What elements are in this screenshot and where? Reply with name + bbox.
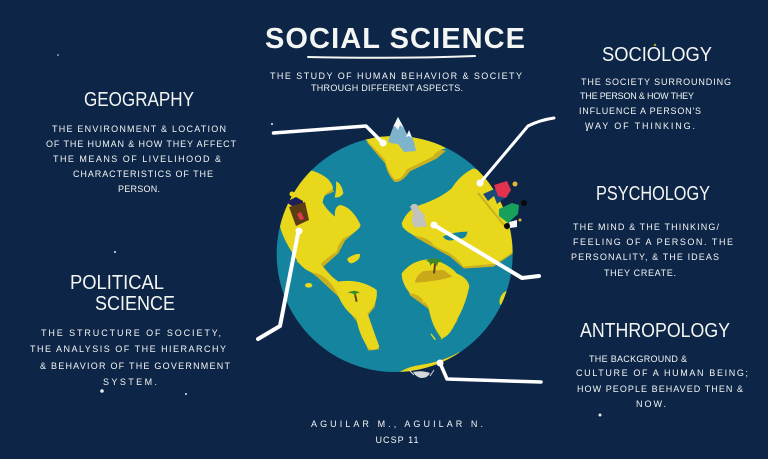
heading: anthropology: ANTHROPOLOGY xyxy=(580,320,730,342)
title: SOCIAL SCIENCE xyxy=(265,23,525,55)
land shadows xyxy=(297,142,513,351)
panel: geography xyxy=(46,89,236,194)
text: geography description: PERSON. xyxy=(118,184,160,194)
heading: sociology: SOCIOLOGY xyxy=(602,44,712,66)
text: psychology description xyxy=(571,222,733,278)
arrow: anthropology line xyxy=(440,363,541,382)
text: geography description: OF THE HUMAN & HOW THEY AFFECT xyxy=(46,139,236,149)
text: anthropology description: THE BACKGROUND & xyxy=(589,354,687,364)
text: political science description: THE STRUCTURE OF SOCIETY, xyxy=(41,328,221,338)
heading: political science: POLITICAL xyxy=(70,272,164,294)
icon: palm tree south america xyxy=(347,291,360,302)
arrow: political science line xyxy=(258,231,298,339)
land: south cap xyxy=(400,352,460,372)
heading: political science xyxy=(70,272,175,315)
text: sociology description xyxy=(579,77,731,131)
ocean xyxy=(277,136,513,372)
land: islands xyxy=(305,181,508,340)
panel: anthropology xyxy=(576,320,748,409)
credits: UCSP 11 xyxy=(376,435,418,445)
subtitle: THE STUDY OF HUMAN BEHAVIOR & SOCIETY xyxy=(270,71,522,81)
text: psychology description: FEELING OF A PERSON. THE xyxy=(573,237,733,247)
text: geography description: THE ENVIRONMENT & LOCATION xyxy=(52,124,226,134)
land: north america xyxy=(280,170,379,350)
text: political science description: THE ANALYSIS OF THE HIERARCHY xyxy=(30,344,226,354)
subtitle xyxy=(270,71,522,93)
text: sociology description: INFLUENCE A PERSON'S xyxy=(579,106,701,116)
panel: sociology xyxy=(579,44,731,131)
credits: AGUILAR M., AGUILAR N. xyxy=(311,419,483,429)
text: geography description: CHARACTERISTICS OF THE xyxy=(73,169,213,179)
icon: desert patch xyxy=(415,270,453,283)
arrow: geography line xyxy=(274,126,383,143)
land: north xyxy=(365,133,446,179)
icon: palm tree africa xyxy=(426,258,444,273)
text: political science description xyxy=(30,328,230,387)
icon: podium with speaker xyxy=(286,192,309,226)
icon: thinker statue xyxy=(410,204,427,227)
heading: geography: GEOGRAPHY xyxy=(84,89,194,111)
text: anthropology description: HOW PEOPLE BEHAVED THEN & xyxy=(577,384,743,394)
arrow: sociology line xyxy=(480,118,554,183)
background specks xyxy=(57,44,656,417)
arrow: psychology line xyxy=(434,225,539,278)
heading: psychology: PSYCHOLOGY xyxy=(596,183,710,205)
text: anthropology description: NOW. xyxy=(636,399,666,409)
panel: political science xyxy=(30,272,230,387)
text: psychology description: THEY CREATE. xyxy=(604,268,676,278)
panel: psychology xyxy=(571,183,733,278)
icon: people xyxy=(478,181,527,230)
heading: political science: SCIENCE xyxy=(95,293,175,315)
icon: skull relic xyxy=(409,370,434,378)
text: sociology description: THE SOCIETY SURROUNDING xyxy=(581,77,731,87)
text: sociology description: THE PERSON & HOW THEY xyxy=(580,91,694,101)
globe xyxy=(277,133,515,377)
text: political science description: & BEHAVIOR OF THE GOVERNMENT xyxy=(40,361,230,371)
text: anthropology description xyxy=(576,354,748,409)
land: africa xyxy=(402,259,469,338)
text: sociology description: WAY OF THINKING. xyxy=(585,121,695,131)
text: geography description: THE MEANS OF LIVELIHOOD & xyxy=(53,154,221,164)
text: psychology description: PERSONALITY, & THE IDEAS xyxy=(571,252,719,262)
text: anthropology description: CULTURE OF A HUMAN BEING; xyxy=(576,368,748,378)
text: political science description: SYSTEM. xyxy=(103,377,157,387)
credits xyxy=(311,419,483,445)
water: inland sea xyxy=(443,232,467,240)
land: eurasia xyxy=(402,168,515,267)
text: psychology description: THE MIND & THE THINKING/ xyxy=(573,222,719,232)
icon: mountain xyxy=(388,117,416,152)
subtitle: THROUGH DIFFERENT ASPECTS. xyxy=(311,83,463,93)
text: geography description xyxy=(46,124,236,194)
line end dots xyxy=(296,140,484,366)
